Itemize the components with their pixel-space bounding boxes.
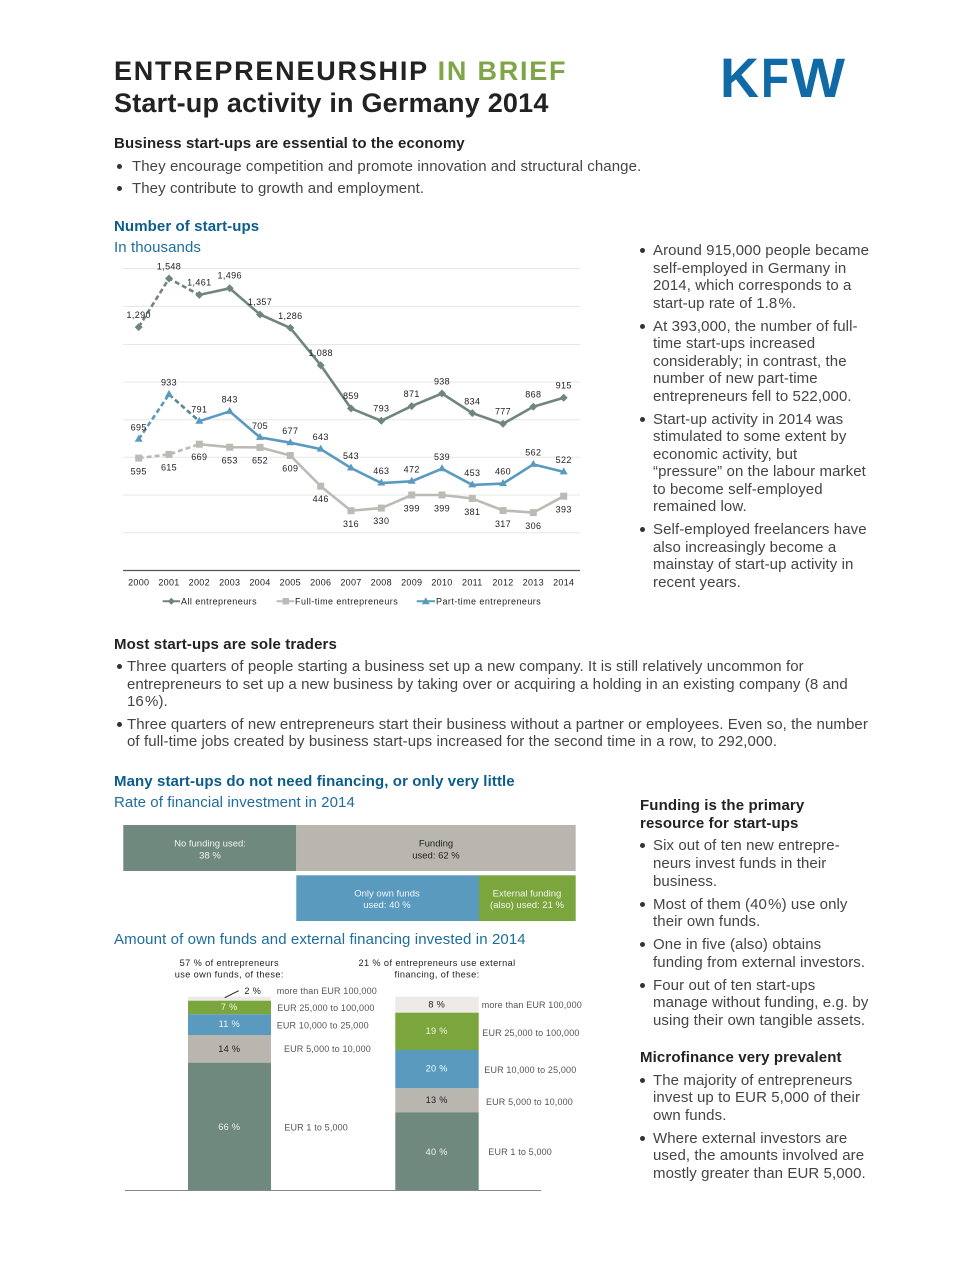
text block: funding is the primary resource [640, 797, 868, 1029]
segment percentages: 14 % [218, 1044, 240, 1054]
data labels: 539 [434, 452, 450, 462]
text block: microfinance: mostly greater than EUR 5,000. [653, 1165, 866, 1182]
text block: start-up findings: self-employed in Germany in [653, 260, 846, 277]
data labels: 871 [404, 389, 420, 399]
chart: rate of financial investment: used: 62 % [412, 850, 460, 862]
text block: start-up findings [640, 242, 869, 591]
data labels: 1,548 [157, 261, 181, 271]
x axis years: 2013 [523, 578, 544, 588]
text block: funding is the primary resource: manage without funding, e.g. by [653, 994, 868, 1011]
segment percentages: 40 % [426, 1147, 448, 1157]
segment percentages [218, 986, 448, 1157]
chart headings: use own funds, of these: [175, 970, 284, 980]
text block: start-up findings: time start-ups increased [653, 335, 815, 352]
data labels: 1,461 [187, 278, 211, 288]
chart: rate of financial investment: (also) used: 21 % [490, 900, 565, 911]
range labels: EUR 10,000 to 25,000 [277, 1020, 369, 1030]
data labels: 669 [191, 452, 207, 462]
data labels: 463 [373, 466, 389, 476]
data labels: 316 [343, 519, 359, 529]
text block: sole traders: entrepreneurs to set up a new business by taking over or acquiring a holding in an existing company (8 and [127, 676, 848, 693]
data labels: 938 [434, 376, 450, 386]
range labels: more than EUR 100,000 [482, 1000, 582, 1010]
legend [163, 596, 541, 606]
text block: sole traders: of full-time jobs created by business start-ups increased for the second time in a row, to 292,000. [127, 733, 777, 750]
data labels: 843 [222, 394, 238, 404]
text block: sole traders: 16 %). [127, 693, 168, 710]
x axis years: 2006 [310, 578, 331, 588]
text block: funding is the primary resource: resource for start-ups [640, 815, 799, 832]
text block: start-up findings: also increasingly become a [653, 539, 836, 556]
bar: own funds [188, 997, 271, 1190]
x axis years: 2005 [280, 578, 301, 588]
data labels: 652 [252, 456, 268, 466]
data labels: 453 [464, 468, 480, 478]
line chart: number of start-ups [123, 261, 580, 606]
heading: financing [114, 773, 515, 811]
text block: business start-ups [114, 135, 641, 197]
text block: microfinance: The majority of entrepreneurs [653, 1072, 852, 1089]
x axis years: 2008 [371, 578, 392, 588]
range labels: EUR 25,000 to 100,000 [482, 1028, 580, 1038]
stacked bar chart: amounts invested [125, 958, 582, 1191]
heading: amount invested: Amount of own funds and external financing invested in 2014 [114, 931, 526, 948]
heading: financing: Many start-ups do not need financing, or only very little [114, 773, 515, 790]
chart: rate of financial investment: External funding [493, 888, 561, 900]
text block: start-up findings: entrepreneurs fell to 522,000. [653, 388, 852, 405]
data labels: 1,286 [278, 311, 302, 321]
heading: number of start-ups [114, 218, 259, 256]
text block: start-up findings: considerably; in contrast, the [653, 353, 847, 370]
legend: Part-time entrepreneurs [436, 596, 541, 606]
data labels: 653 [222, 456, 238, 466]
series: all entrepreneurs [135, 274, 568, 428]
data labels: 317 [495, 519, 511, 529]
range labels: EUR 25,000 to 100,000 [277, 1003, 375, 1013]
x axis years: 2012 [492, 578, 514, 588]
text block: funding is the primary resource: funding from external investors. [653, 954, 865, 971]
data labels: 543 [343, 451, 359, 461]
series: full-time entrepreneurs [135, 441, 567, 516]
data labels: 705 [252, 421, 268, 431]
data labels: 460 [495, 466, 511, 476]
range labels: EUR 5,000 to 10,000 [486, 1097, 573, 1107]
segment percentages: 7 % [221, 1002, 238, 1012]
range labels [277, 986, 582, 1157]
series: part-time entrepreneurs [135, 390, 568, 487]
text block: business start-ups: Business start-ups are essential to the economy [114, 135, 465, 152]
legend: Full-time entrepreneurs [295, 596, 398, 606]
x axis years: 2007 [340, 578, 362, 588]
data labels: 1,357 [248, 297, 272, 307]
data labels: 777 [495, 407, 511, 417]
text block: sole traders: Most start-ups are sole traders [114, 636, 337, 653]
chart: rate of financial investment: No funding used: [174, 838, 246, 850]
text block: start-up findings: to become self-employed [653, 481, 823, 498]
heading: number of start-ups: Number of start-ups [114, 218, 259, 235]
text block: microfinance: invest up to EUR 5,000 of their [653, 1089, 860, 1106]
data labels: 677 [282, 426, 298, 436]
data labels: 859 [343, 391, 359, 401]
data labels: 791 [191, 404, 207, 414]
data labels: 562 [525, 448, 541, 458]
chart: rate of financial investment: Funding [419, 838, 453, 850]
x axis years [128, 578, 574, 588]
data labels: 595 [131, 466, 147, 476]
bar: external financing [395, 997, 479, 1190]
segment percentages: 8 % [428, 1000, 445, 1010]
x axis years: 2014 [553, 578, 574, 588]
range labels: EUR 5,000 to 10,000 [284, 1044, 371, 1054]
x axis years: 2004 [249, 578, 271, 588]
chart headings: financing, of these: [394, 970, 480, 980]
segment percentages: 11 % [219, 1019, 240, 1029]
data labels: 399 [404, 504, 420, 514]
text block: funding is the primary resource: One in five (also) obtains [653, 936, 821, 953]
data labels: 381 [464, 507, 480, 517]
data labels: 695 [131, 422, 147, 432]
text block: start-up findings: mainstay of start-up activity in [653, 556, 853, 573]
text block: start-up findings: At 393,000, the number of full- [653, 318, 858, 335]
data labels: 615 [161, 462, 177, 472]
x axis years: 2001 [158, 578, 180, 588]
data labels: 793 [373, 404, 389, 414]
data labels: 306 [525, 521, 541, 531]
text block: start-up findings: “pressure” on the labour market [653, 463, 866, 480]
heading: financing: Rate of financial investment in 2014 [114, 794, 355, 811]
text block: microfinance: used, the amounts involved are [653, 1147, 864, 1164]
title [114, 56, 567, 118]
text block: sole traders: Three quarters of people starting a business set up a new company. It is still relatively uncommon for [127, 658, 804, 675]
text block: funding is the primary resource: using their own tangible assets. [653, 1012, 865, 1029]
text block: microfinance: own funds. [653, 1107, 726, 1124]
data labels: 1,496 [218, 270, 242, 280]
data labels: 933 [161, 378, 177, 388]
x axis years: 2011 [462, 578, 483, 588]
data labels: 446 [313, 494, 329, 504]
text block: start-up findings: remained low. [653, 498, 747, 515]
data labels [127, 261, 572, 531]
text block: funding is the primary resource: Most of them (40 %) use only [653, 896, 848, 913]
text block: funding is the primary resource: neurs invest funds in their [653, 855, 826, 872]
segment percentages: 19 % [426, 1026, 448, 1036]
chart headings [175, 958, 516, 980]
data labels: 522 [556, 455, 572, 465]
data labels: 1,088 [309, 348, 333, 358]
data labels: 915 [556, 381, 572, 391]
x axis years: 2002 [189, 578, 210, 588]
legend: All entrepreneurs [181, 596, 257, 606]
text block: business start-ups: They encourage competition and promote innovation and structural change. [132, 158, 641, 175]
text block: funding is the primary resource: their own funds. [653, 913, 760, 930]
segment percentages: 20 % [426, 1064, 448, 1074]
chart: rate of financial investment [123, 825, 576, 921]
text block: start-up findings: Start-up activity in 2014 was [653, 411, 843, 428]
range labels: EUR 1 to 5,000 [488, 1147, 552, 1157]
text block: sole traders: Three quarters of new entrepreneurs start their business without a partner or employees. Even so, the number [127, 716, 868, 733]
chart headings: 57 % of entrepreneurs [180, 958, 279, 968]
segment percentages: 66 % [218, 1122, 240, 1132]
text block: start-up findings: recent years. [653, 574, 741, 591]
segment percentages: 2 % [244, 986, 261, 996]
text block: funding is the primary resource: Six out of ten new entrepre- [653, 837, 840, 854]
segment percentages: 13 % [426, 1095, 448, 1105]
chart: rate of financial investment: Only own funds [354, 888, 420, 900]
x axis years: 2000 [128, 578, 149, 588]
data labels: 393 [556, 504, 572, 514]
data labels: 868 [525, 390, 541, 400]
text block: funding is the primary resource: business. [653, 873, 717, 890]
text block: funding is the primary resource: Four out of ten start-ups [653, 977, 815, 994]
text block: start-up findings: Self-employed freelancers have [653, 521, 867, 538]
range labels: more than EUR 100,000 [277, 986, 377, 996]
x axis years: 2010 [431, 578, 453, 588]
data labels: 330 [373, 516, 389, 526]
text block: business start-ups: They contribute to growth and employment. [132, 180, 424, 197]
data labels: 1,290 [127, 310, 151, 320]
text block: start-up findings: number of new part-time [653, 370, 818, 387]
text block: microfinance: Microfinance very prevalent [640, 1049, 842, 1066]
data labels: 609 [282, 464, 298, 474]
data labels: 399 [434, 504, 450, 514]
x axis years: 2009 [401, 578, 422, 588]
text block: microfinance: Where external investors are [653, 1130, 847, 1147]
text block: start-up findings: start-up rate of 1.8 %. [653, 295, 796, 312]
text block: start-up findings: economic activity, but [653, 446, 797, 463]
data labels: 834 [464, 396, 480, 406]
text block: microfinance [640, 1049, 866, 1182]
text block: funding is the primary resource: Funding is the primary [640, 797, 804, 814]
text block: start-up findings: stimulated to some extent by [653, 428, 846, 445]
heading: number of start-ups: In thousands [114, 239, 201, 256]
range labels: EUR 10,000 to 25,000 [484, 1065, 576, 1075]
x axis years: 2003 [219, 578, 240, 588]
text block: start-up findings: Around 915,000 people became [653, 242, 869, 259]
logo: KfW [720, 48, 845, 104]
title: ENTREPRENEURSHIP IN BRIEF [114, 56, 567, 86]
text block: sole traders [114, 636, 868, 750]
range labels: EUR 1 to 5,000 [284, 1122, 348, 1132]
chart headings: 21 % of entrepreneurs use external [358, 958, 516, 968]
title: Start-up activity in Germany 2014 [114, 88, 549, 118]
text block: start-up findings: 2014, which corresponds to a [653, 277, 851, 294]
data labels: 643 [313, 432, 329, 442]
chart: rate of financial investment: used: 40 % [363, 900, 411, 911]
chart: rate of financial investment: 38 % [199, 850, 221, 862]
data labels: 472 [404, 464, 420, 474]
